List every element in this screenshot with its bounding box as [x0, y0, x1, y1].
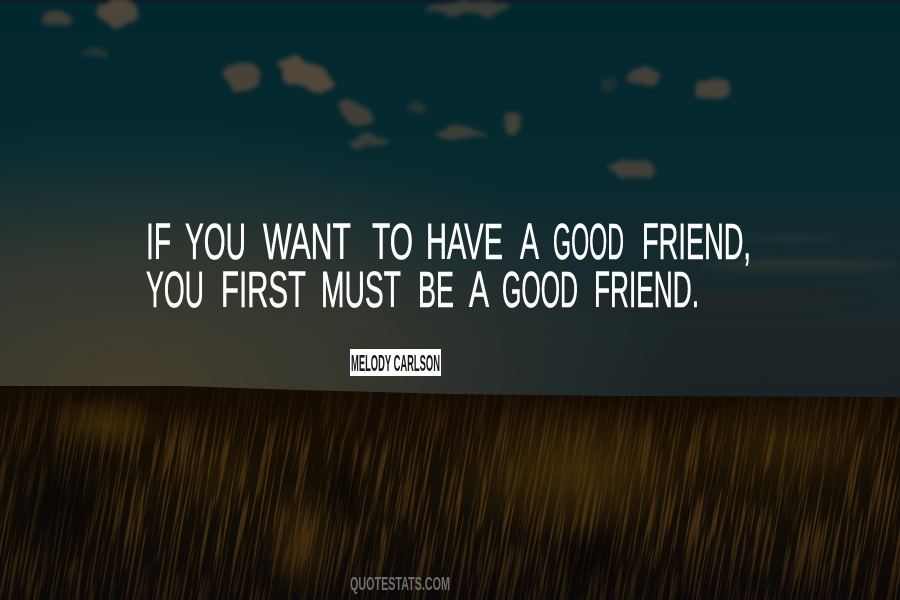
quote line 2: MUST [321, 261, 401, 318]
quote line 1: GOOD [553, 213, 624, 270]
author label [350, 349, 441, 376]
quote line 1: A [520, 213, 539, 270]
quote line 1: YOU [185, 213, 246, 270]
background: evening sky [0, 0, 900, 400]
quote line 2: FRIEND. [594, 261, 699, 318]
quote line 2: GOOD [502, 261, 578, 318]
quote line 1: FRIEND, [642, 213, 751, 270]
wheat field [0, 380, 900, 600]
quote line 2: BE [418, 261, 454, 318]
quote line 2: YOU [146, 261, 204, 318]
quote line 1: WANT [263, 213, 351, 270]
clouds [41, 0, 731, 178]
quote line 1: HAVE [426, 213, 503, 270]
text: MELODY CARLSON [351, 350, 440, 376]
quote line 2: FIRST [221, 261, 306, 318]
quote line 1: TO [372, 213, 413, 270]
quote line 1 [146, 213, 751, 270]
quote text [146, 213, 751, 318]
quote line 1: IF [146, 213, 171, 270]
quote line 2 [146, 261, 699, 318]
quote line 2: A [469, 261, 489, 318]
watermark: QUOTESTATS.COM [350, 574, 450, 594]
